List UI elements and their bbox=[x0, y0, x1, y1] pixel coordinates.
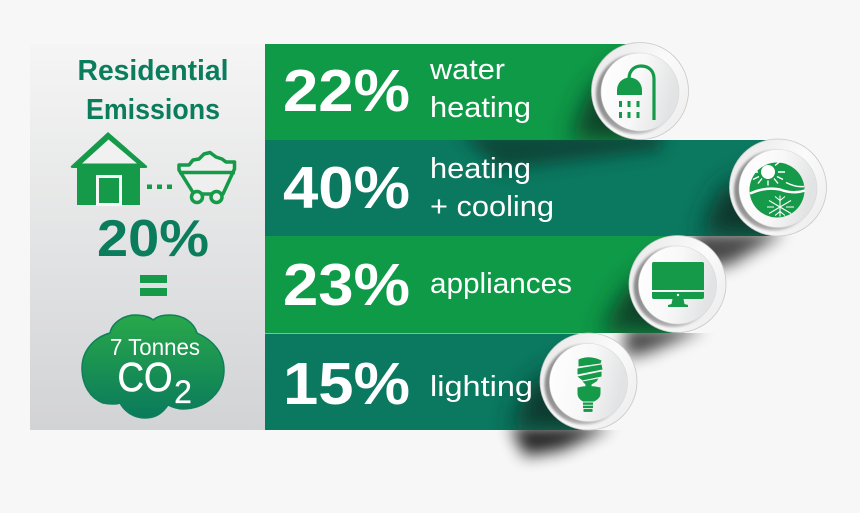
icon: equals bbox=[140, 275, 167, 296]
label: lighting: lighting bbox=[430, 371, 533, 403]
icon: shower head bbox=[617, 66, 654, 120]
label: heating + cooling: heating bbox=[430, 153, 531, 185]
badge: monitor bbox=[629, 236, 726, 332]
cloud: 7 tonnes CO2: 7 Tonnes bbox=[110, 334, 200, 360]
heading: residential emissions: Residential bbox=[78, 55, 228, 87]
label: water heating: heating bbox=[430, 92, 531, 124]
icon: dots bbox=[147, 184, 172, 189]
bar: appliances bbox=[265, 236, 678, 333]
icon: light bulb bbox=[578, 357, 602, 412]
shadows cast on background bbox=[510, 232, 785, 456]
heading: residential emissions bbox=[78, 55, 228, 126]
label: heating + cooling: + cooling bbox=[430, 191, 554, 223]
panel: residential emissions summary bbox=[30, 44, 265, 430]
label: water heating bbox=[429, 54, 531, 124]
badge: sun and snow bbox=[730, 139, 826, 236]
bar: lighting bbox=[265, 334, 590, 430]
cloud: 7 tonnes CO2 bbox=[82, 315, 224, 418]
heading: residential emissions: Emissions bbox=[86, 94, 220, 126]
label: heating + cooling bbox=[430, 153, 554, 223]
badge: shower bbox=[592, 42, 688, 140]
value: 23%: 23% bbox=[283, 252, 410, 318]
icon: coal cart bbox=[179, 152, 235, 202]
icon: house bbox=[71, 132, 147, 205]
cloud: 7 tonnes CO2: 2 bbox=[174, 374, 192, 410]
bar: heating + cooling bbox=[265, 132, 780, 236]
icon: monitor bbox=[652, 262, 704, 307]
value: 22%: 22% bbox=[283, 58, 410, 124]
badge: light bulb bbox=[540, 333, 637, 430]
label: appliances: appliances bbox=[430, 268, 572, 300]
bar: water heating bbox=[265, 44, 640, 140]
label: water heating: water bbox=[429, 54, 505, 86]
stat: 20%: 20% bbox=[97, 210, 209, 268]
icon: sun and snowflake bbox=[750, 161, 805, 218]
value: 40%: 40% bbox=[283, 155, 410, 221]
cloud: 7 tonnes CO2: CO bbox=[118, 354, 172, 400]
value: 15%: 15% bbox=[283, 351, 410, 417]
